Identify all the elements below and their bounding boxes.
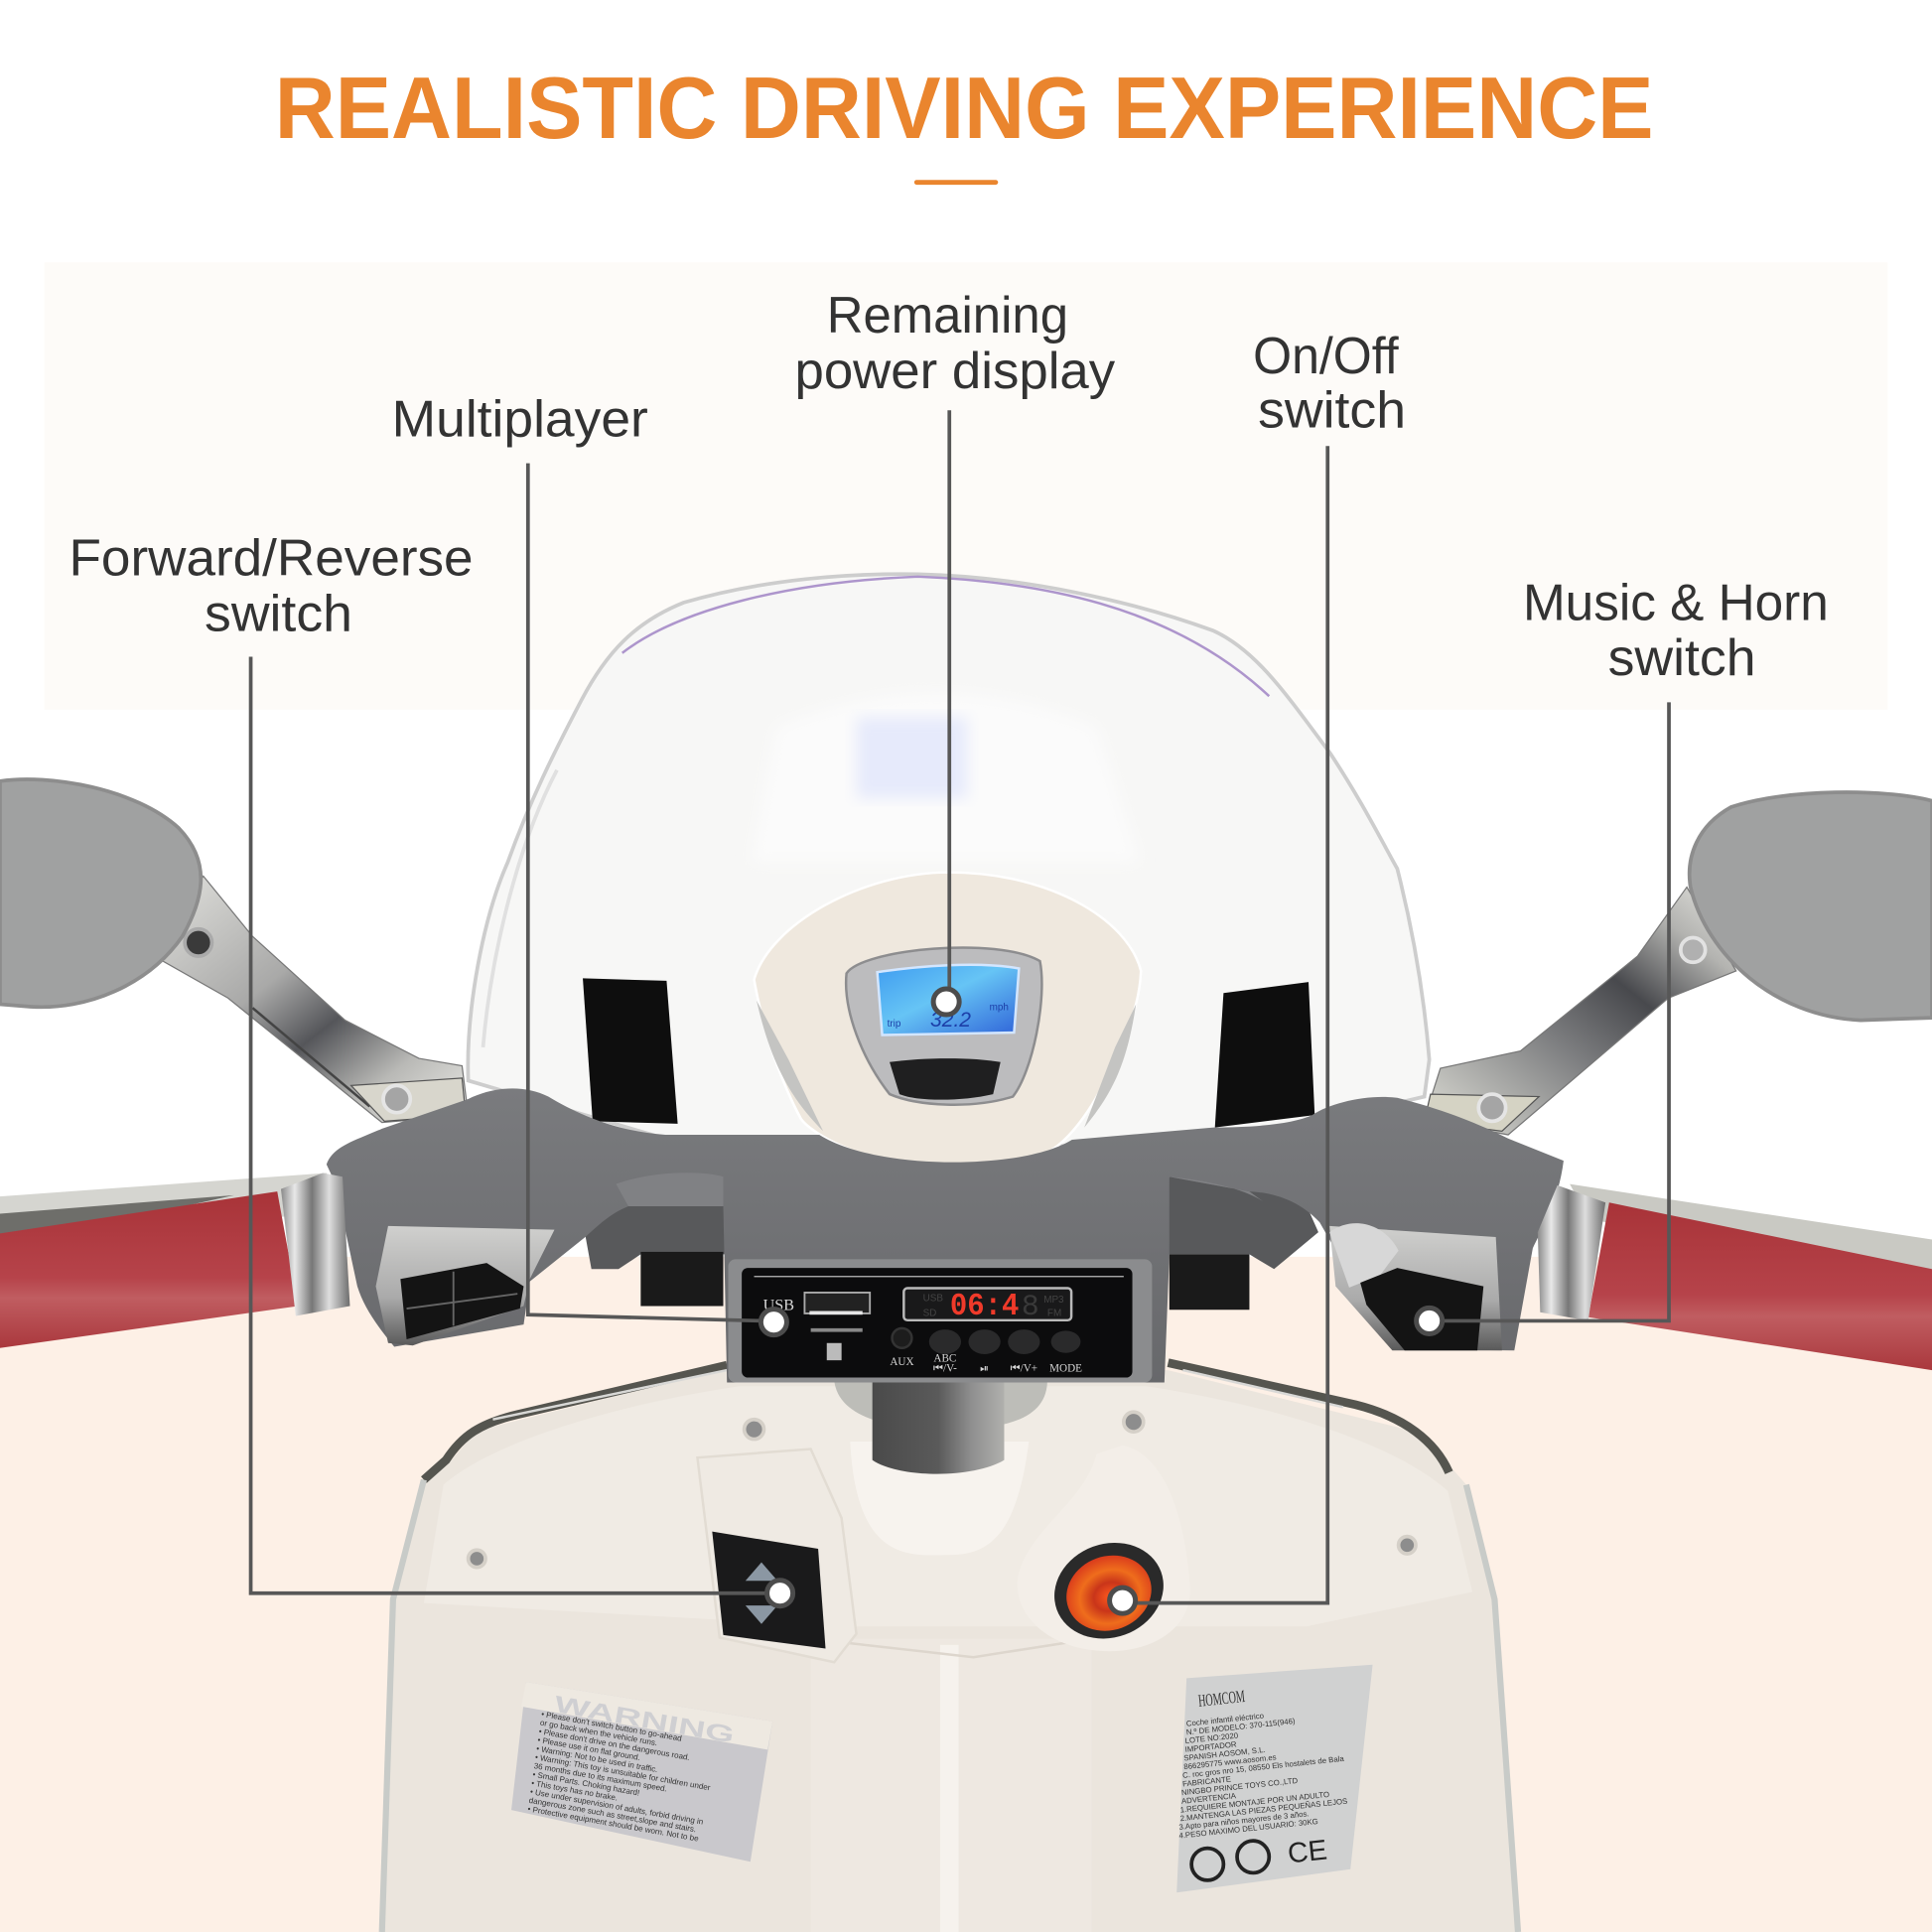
right red grip bbox=[1588, 1202, 1932, 1370]
label: remaining power display bbox=[794, 287, 1115, 400]
leader: multiplayer bbox=[528, 464, 786, 1335]
left under-bar block bbox=[640, 1252, 724, 1307]
left red grip bbox=[0, 1191, 298, 1348]
steering column bbox=[834, 1380, 1047, 1474]
usb label: USB bbox=[763, 1297, 794, 1313]
button labels: MODE bbox=[1049, 1362, 1082, 1374]
media buttons bbox=[929, 1329, 1080, 1354]
lcd screen: trip bbox=[888, 1019, 901, 1030]
led display: USB bbox=[923, 1294, 943, 1305]
product info sticker: 1.REQUIERE MONTAJE POR UN ADULTO bbox=[1179, 1790, 1330, 1815]
leader: music and horn bbox=[1417, 702, 1669, 1333]
button labels: ⏮/V- bbox=[933, 1362, 957, 1374]
forward/reverse switch housing bbox=[697, 1449, 857, 1662]
left grip collar bbox=[281, 1173, 349, 1315]
leader: forward/reverse bbox=[251, 656, 793, 1606]
product info sticker: LOTE NO:2020 bbox=[1184, 1730, 1239, 1745]
warning sticker: • Please don't switch button to go-ahead bbox=[540, 1710, 682, 1743]
label: music and horn switch bbox=[1523, 574, 1829, 687]
usb port bbox=[804, 1293, 870, 1314]
label: forward/reverse switch: Forward/Reverse bbox=[69, 530, 474, 588]
scooter body bbox=[382, 1363, 1518, 1932]
warning sticker: • Please don't drive on the dangerous road. bbox=[538, 1726, 690, 1762]
warning sticker: • Small Parts. Choking hazard! bbox=[532, 1770, 640, 1798]
left windshield mount block bbox=[583, 978, 678, 1124]
right handle chrome bar bbox=[1570, 1184, 1932, 1269]
button labels: ⏮/V+ bbox=[1011, 1362, 1037, 1374]
right mirror bbox=[1425, 792, 1932, 1135]
tf icon bbox=[827, 1343, 842, 1360]
left mirror bbox=[0, 779, 469, 1123]
right grip collar bbox=[1538, 1185, 1605, 1320]
product info sticker: HOMCOM bbox=[1197, 1687, 1246, 1711]
led display: MP3 bbox=[1043, 1295, 1064, 1306]
product info sticker: 2.MANTENGA LAS PIEZAS PEQUEÑAS LEJOS bbox=[1179, 1797, 1348, 1823]
leader: on/off bbox=[1110, 446, 1327, 1613]
label: remaining power display: Remaining bbox=[827, 287, 1068, 345]
product info sticker: N.º DE MODELO: 370-115(946) bbox=[1185, 1717, 1296, 1736]
warning sticker: WARNING bbox=[552, 1691, 737, 1748]
title: REALISTIC DRIVING EXPERIENCE bbox=[275, 59, 1654, 157]
media player panel bbox=[728, 1259, 1152, 1382]
lcd screen: mph bbox=[990, 1003, 1009, 1014]
right under-bar block bbox=[1170, 1254, 1249, 1310]
product info sticker bbox=[1176, 1665, 1373, 1892]
led display: FM bbox=[1047, 1308, 1061, 1318]
product info sticker: FABRICANTE bbox=[1182, 1774, 1231, 1789]
product info sticker: ADVERTENCIA bbox=[1180, 1791, 1237, 1806]
switch arrows bbox=[746, 1563, 777, 1624]
product info sticker: 4.PESO MAXIMO DEL USUARIO: 30KG bbox=[1178, 1817, 1318, 1841]
instrument cluster bbox=[846, 948, 1041, 1105]
card slot bbox=[811, 1328, 863, 1332]
warning sticker: dangerous zone such as street,slope and stairs. bbox=[528, 1796, 697, 1834]
body screws bbox=[469, 1412, 1416, 1568]
product info sticker: IMPORTADOR bbox=[1184, 1739, 1237, 1754]
warning sticker bbox=[511, 1682, 772, 1862]
right windshield mount block bbox=[1215, 982, 1314, 1128]
product info sticker: SPANISH AOSOM, S.L. bbox=[1183, 1745, 1266, 1762]
warning sticker: • Warning: This toy is unsuitable for children under bbox=[534, 1752, 711, 1792]
windshield bbox=[468, 574, 1430, 1146]
label: on/off switch bbox=[1253, 328, 1406, 440]
label: forward/reverse switch: switch bbox=[205, 585, 352, 642]
product info sticker: NINGBO PRINCE TOYS CO.,LTD bbox=[1180, 1776, 1299, 1797]
warning sticker: 36 months due to its maximum speed. bbox=[533, 1761, 668, 1794]
lcd screen bbox=[878, 965, 1019, 1035]
button labels: AUX bbox=[890, 1356, 914, 1368]
label: music and horn switch: Music & Horn bbox=[1523, 574, 1829, 631]
label: remaining power display: power display bbox=[794, 343, 1115, 400]
button labels: ABC bbox=[933, 1352, 956, 1364]
aux jack bbox=[893, 1328, 911, 1348]
product info sticker: C. roc gros nro 15, 08550 Els hostalets de Bala bbox=[1182, 1754, 1345, 1780]
label panel background bbox=[45, 262, 1887, 710]
led display: 06:4 bbox=[950, 1290, 1019, 1324]
label: multiplayer: Multiplayer bbox=[392, 390, 648, 448]
leader: remaining power bbox=[933, 410, 959, 1015]
warning sticker: • Protective equipment should be worn. Not to be bbox=[527, 1804, 700, 1844]
rocker switch bbox=[712, 1532, 826, 1649]
label: forward/reverse switch bbox=[69, 530, 474, 642]
led display: 8 bbox=[1022, 1290, 1039, 1323]
warning sticker: • This toys has no brake. bbox=[531, 1778, 619, 1803]
button labels bbox=[890, 1352, 1082, 1374]
warning sticker: • Use under supervision of adults, forbid driving in bbox=[529, 1787, 704, 1827]
product info sticker: 3.Apto para niños mayores de 3 años. bbox=[1178, 1809, 1310, 1832]
label: on/off switch: On/Off bbox=[1253, 328, 1399, 385]
led display bbox=[903, 1289, 1071, 1324]
product info sticker: CE bbox=[1287, 1834, 1328, 1869]
product info sticker: Coche infantil eléctrico bbox=[1185, 1712, 1265, 1728]
warning sticker: or go back when the vehicle runs. bbox=[539, 1719, 658, 1747]
right switch pod bbox=[1329, 1223, 1502, 1350]
warning sticker: • Please use it on flat ground. bbox=[537, 1735, 641, 1762]
left switch pod bbox=[376, 1226, 554, 1345]
lower vent bbox=[890, 1058, 1001, 1100]
button labels: ⏯ bbox=[980, 1362, 989, 1374]
power switch housing bbox=[1018, 1446, 1190, 1654]
dashboard cowl bbox=[755, 873, 1141, 1170]
label: on/off switch: switch bbox=[1258, 382, 1406, 440]
product info sticker: 866295775 www.aosom.es bbox=[1183, 1752, 1277, 1771]
handlebar dark hollows bbox=[579, 1176, 1318, 1269]
handlebar housing bbox=[327, 1088, 1564, 1382]
warning sticker: • Warning: Not to be used in traffic. bbox=[536, 1744, 658, 1774]
label: music and horn switch: switch bbox=[1608, 629, 1756, 687]
lcd screen: 32.2 bbox=[930, 1009, 971, 1032]
left handle chrome bar bbox=[0, 1173, 333, 1235]
title underline bbox=[914, 180, 998, 185]
led display: SD bbox=[923, 1308, 936, 1318]
